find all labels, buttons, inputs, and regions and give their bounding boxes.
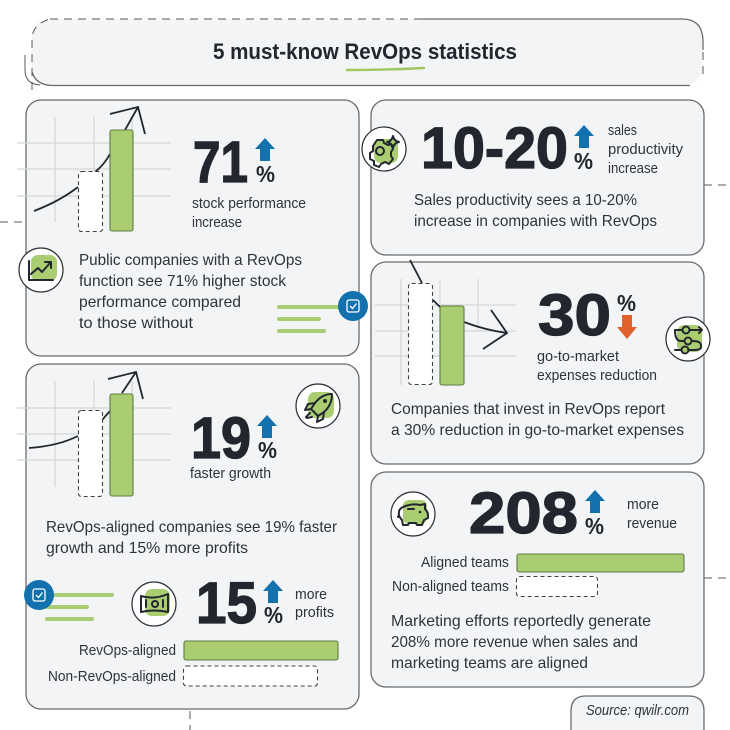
rising bar chart bbox=[17, 107, 171, 232]
heading: 5 must-know RevOps statistics bbox=[213, 39, 517, 64]
stat: 30%: % bbox=[617, 290, 636, 316]
stat caption: stock performance bbox=[192, 196, 306, 212]
icon: workflow bbox=[666, 317, 710, 361]
stat: 208%: 208 bbox=[469, 481, 578, 546]
stat: 71%: % bbox=[256, 161, 275, 187]
stat: 30% bbox=[538, 283, 637, 348]
description: performance compared bbox=[79, 294, 241, 311]
comparison bars: revenue: Aligned teams bbox=[421, 555, 509, 571]
stat: 19%: % bbox=[258, 437, 277, 463]
heading underline bbox=[347, 68, 424, 70]
description: marketing teams are aligned bbox=[391, 655, 588, 672]
panel: 10-20% sales productivity bbox=[362, 100, 704, 255]
panel: 19% faster growth, 15% more profits bbox=[17, 364, 359, 709]
stat: 15%: % bbox=[264, 602, 283, 628]
comparison bars: profits: Non-RevOps-aligned bbox=[48, 669, 176, 685]
icon: gear and sparkle bbox=[362, 127, 406, 171]
stat: 208%: % bbox=[585, 513, 604, 539]
description bbox=[391, 401, 684, 439]
stat caption: profits bbox=[295, 605, 334, 621]
description: function see 71% higher stock bbox=[79, 273, 287, 290]
source note: Source: qwilr.com bbox=[586, 703, 689, 719]
stat caption: expenses reduction bbox=[537, 368, 657, 384]
stat caption bbox=[537, 349, 657, 384]
stat caption: revenue bbox=[627, 516, 677, 532]
stat: 10-20%: 10-20 bbox=[421, 116, 568, 181]
stat: 71%: 71 bbox=[193, 130, 248, 195]
stat caption bbox=[627, 497, 677, 532]
icon: banknote bbox=[132, 582, 176, 626]
icon: piggy bank bbox=[391, 492, 435, 536]
checklist decoration bbox=[24, 580, 112, 619]
stat caption: increase bbox=[192, 215, 242, 231]
description: a 30% reduction in go-to-market expenses bbox=[391, 422, 684, 439]
stat caption: go-to-market bbox=[537, 349, 619, 365]
description: to those without bbox=[79, 315, 194, 332]
rising bar chart bbox=[17, 372, 171, 496]
stat: 19%: 19 bbox=[191, 406, 251, 471]
panel: 71% stock performance bbox=[17, 100, 368, 356]
panel: 30% go-to-market expenses bbox=[371, 260, 710, 464]
comparison bars: revenue: Non-aligned teams bbox=[392, 579, 509, 595]
stat caption: more bbox=[295, 587, 327, 603]
description: Marketing efforts reportedly generate bbox=[391, 613, 651, 630]
comparison bars: revenue bbox=[392, 554, 684, 596]
description: RevOps-aligned companies see 19% faster bbox=[46, 519, 338, 536]
stat: 10-20%: % bbox=[574, 148, 593, 174]
stat caption: sales bbox=[608, 123, 637, 139]
stat caption: increase bbox=[608, 161, 658, 177]
stat caption: faster growth bbox=[190, 466, 271, 482]
panel: 208% more revenue bbox=[371, 472, 704, 687]
stat caption bbox=[295, 587, 334, 621]
description: growth and 15% more profits bbox=[46, 540, 248, 557]
description bbox=[391, 613, 651, 672]
stat: 15%: 15 bbox=[196, 571, 257, 636]
panel: title bbox=[32, 19, 703, 90]
description: Public companies with a RevOps bbox=[79, 252, 302, 269]
description bbox=[46, 519, 338, 557]
description: Sales productivity sees a 10-20% bbox=[414, 192, 637, 209]
source note bbox=[571, 696, 704, 730]
stat caption: productivity bbox=[608, 142, 684, 158]
stat caption bbox=[192, 196, 306, 231]
description: Companies that invest in RevOps report bbox=[391, 401, 666, 418]
description bbox=[79, 252, 302, 332]
comparison bars: profits bbox=[48, 641, 338, 686]
description: increase in companies with RevOps bbox=[414, 213, 657, 230]
stat caption bbox=[608, 123, 684, 177]
stat caption: more bbox=[627, 497, 659, 513]
stat: 30%: 30 bbox=[538, 283, 611, 348]
icon: line chart bbox=[19, 248, 63, 292]
icon: rocket bbox=[296, 384, 340, 428]
description bbox=[414, 192, 657, 230]
description: 208% more revenue when sales and bbox=[391, 634, 638, 651]
comparison bars: profits: RevOps-aligned bbox=[79, 643, 176, 659]
falling bar chart bbox=[375, 260, 516, 385]
checklist decoration bbox=[279, 291, 368, 331]
